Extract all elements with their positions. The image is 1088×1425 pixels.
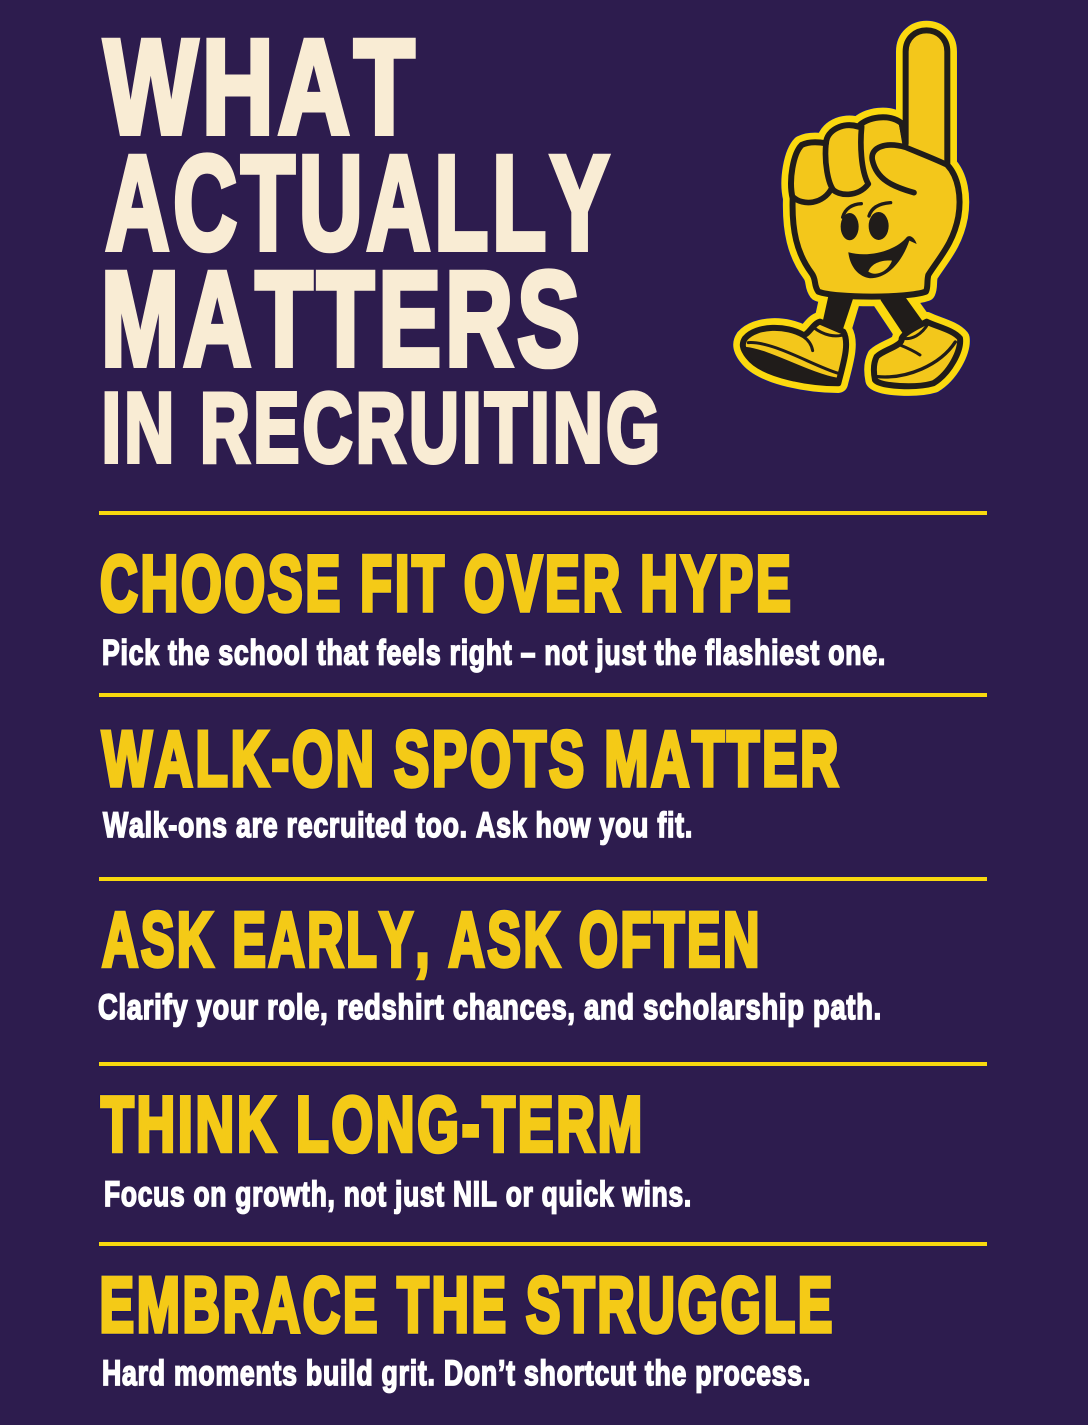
- mascot left shoe: [743, 322, 846, 385]
- section: ask early, ask often: ASK EARLY, ASK OFTEN: [102, 897, 762, 983]
- section: ask early, ask often: ASK EARLY, ASK OFTEN: [102, 897, 762, 983]
- mascot eyes: [841, 203, 891, 240]
- section: think long-term: THINK LONG-TERM: [101, 1080, 645, 1168]
- title: ACTUALLY: [106, 129, 613, 278]
- section: choose fit over hype: [100, 540, 886, 672]
- mascot legs: [823, 293, 922, 335]
- title: [101, 13, 663, 482]
- mascot outer sticker border: [743, 30, 960, 386]
- icon: foam finger mascot: [743, 30, 960, 386]
- section: think long-term: Focus on growth, not just NIL or quick wins.: [104, 1175, 692, 1214]
- title: IN RECRUITING: [102, 372, 663, 482]
- section: ask early, ask often: [98, 897, 882, 1027]
- section: embrace the struggle: [100, 1260, 835, 1393]
- mascot yellow border: [743, 30, 960, 386]
- mascot right shoe: [874, 322, 960, 386]
- mascot fingers and thumb: [793, 123, 947, 203]
- section: walk-on spots matter: [102, 714, 841, 845]
- section: walk-on spots matter: Walk-ons are recruited too. Ask how you fit.: [103, 806, 693, 845]
- title: MATTERS: [101, 245, 584, 394]
- mascot smile: [848, 236, 917, 278]
- section: think long-term: THINK LONG-TERM: [101, 1080, 645, 1168]
- section: embrace the struggle: Hard moments build grit. Don’t shortcut the process.: [102, 1354, 811, 1393]
- title: WHAT: [104, 13, 419, 162]
- mascot hand: [791, 30, 960, 297]
- section: think long-term: [101, 1080, 692, 1214]
- section: ask early, ask often: Clarify your role, redshirt chances, and scholarship path.: [98, 988, 882, 1027]
